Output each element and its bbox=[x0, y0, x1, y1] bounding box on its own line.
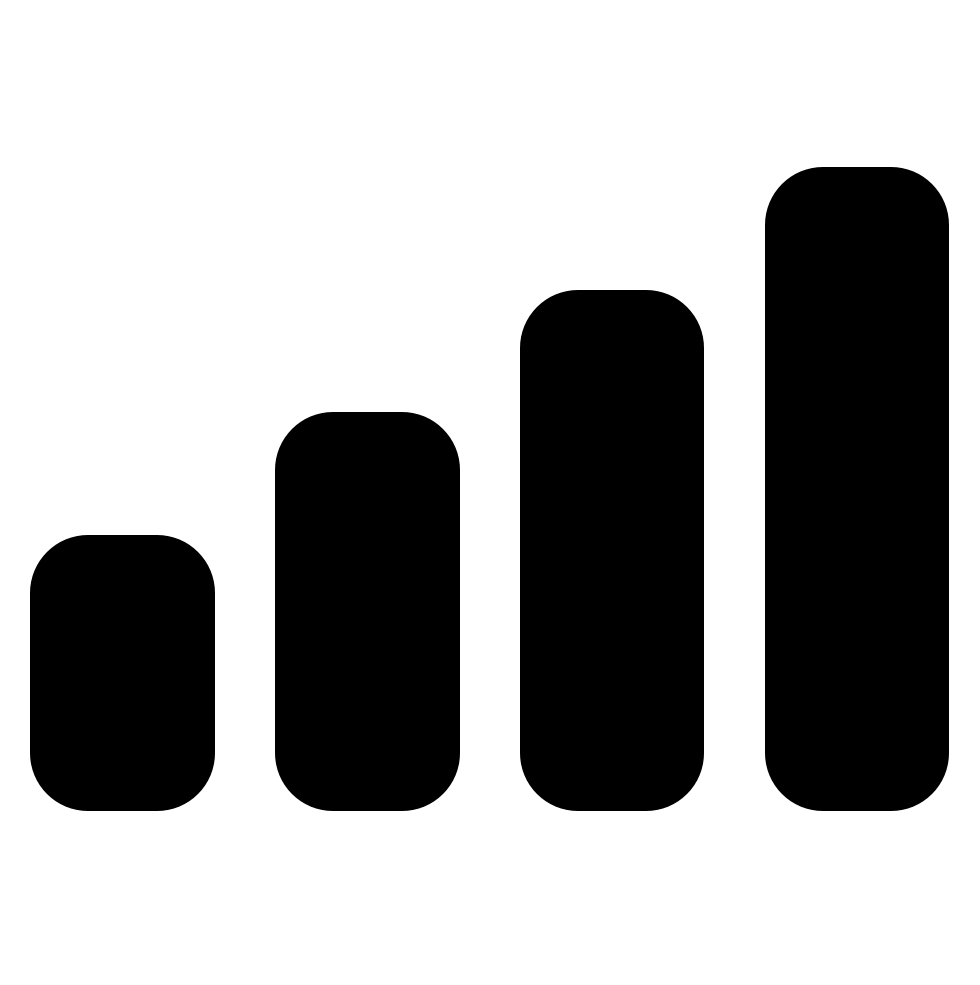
bar 4 (tallest) bbox=[765, 167, 949, 811]
bar 1 (shortest) bbox=[30, 535, 215, 811]
bar 2 bbox=[275, 412, 460, 811]
bar 3 bbox=[520, 290, 704, 811]
